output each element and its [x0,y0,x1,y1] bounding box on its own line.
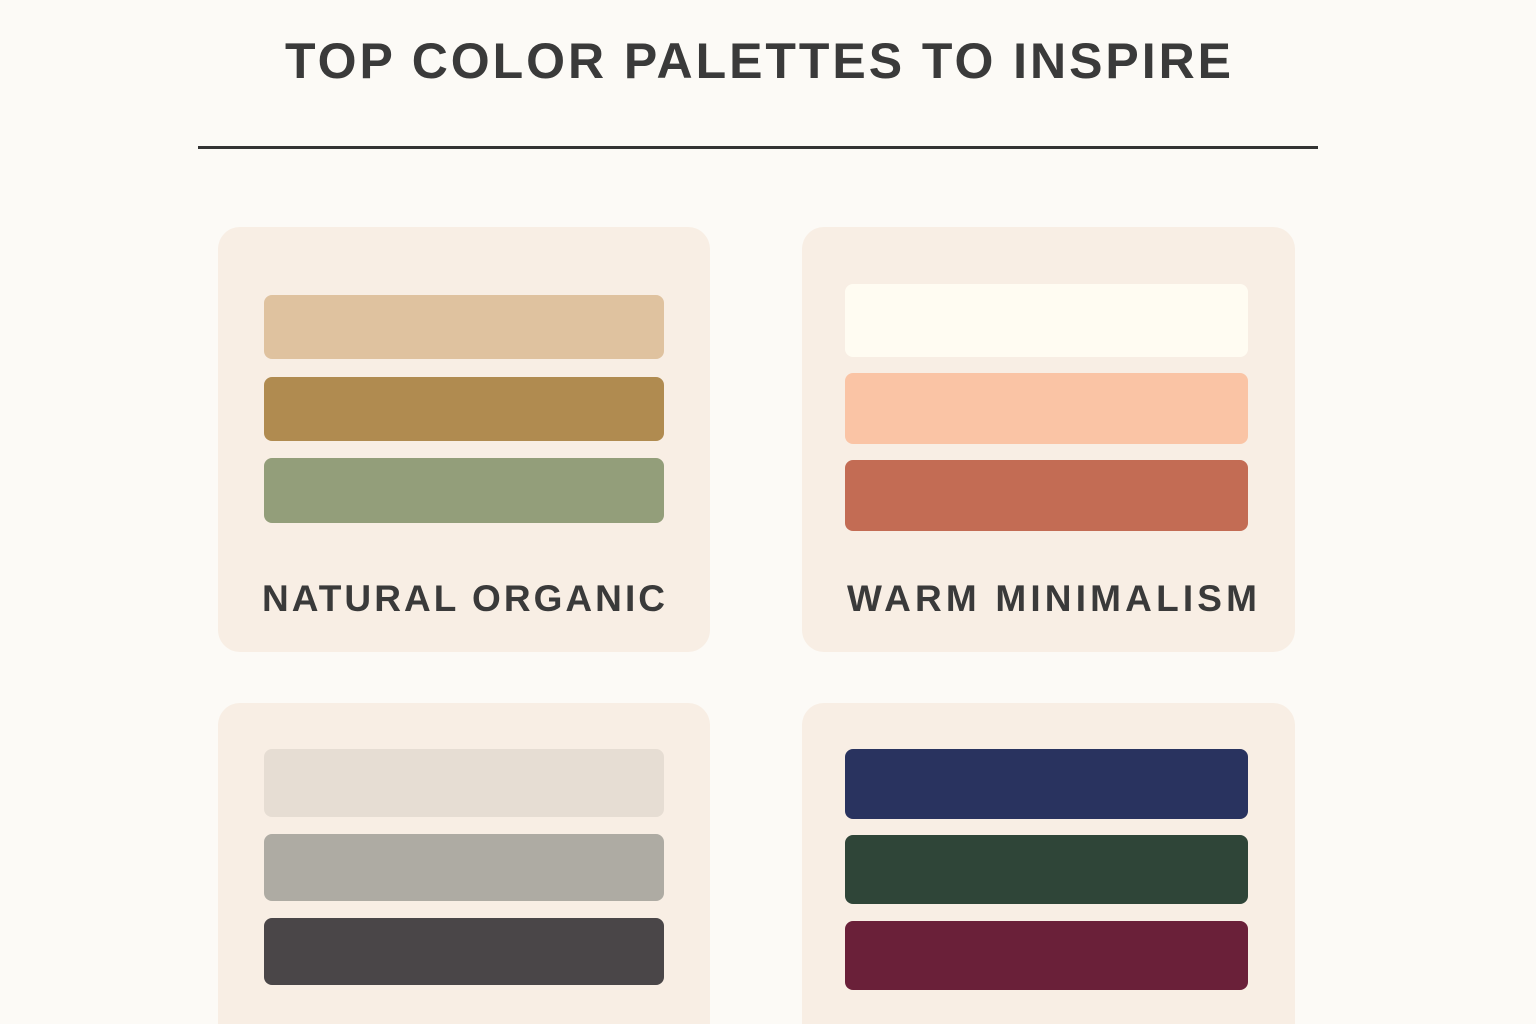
swatches: neutral greys [264,749,664,985]
title: TOP COLOR PALETTES TO INSPIRE [285,33,1231,89]
panel: neutral greys [218,703,710,1024]
swatches: natural organic [264,295,664,523]
panel: natural organic [218,227,710,652]
label: warm minimalism: WARM MINIMALISM [847,578,1257,619]
swatches: warm minimalism [845,284,1248,531]
panel: warm minimalism [802,227,1295,652]
label: natural organic: NATURAL ORGANIC [262,578,665,619]
panel: jewel tones [802,703,1295,1024]
swatches: jewel tones [845,749,1248,990]
